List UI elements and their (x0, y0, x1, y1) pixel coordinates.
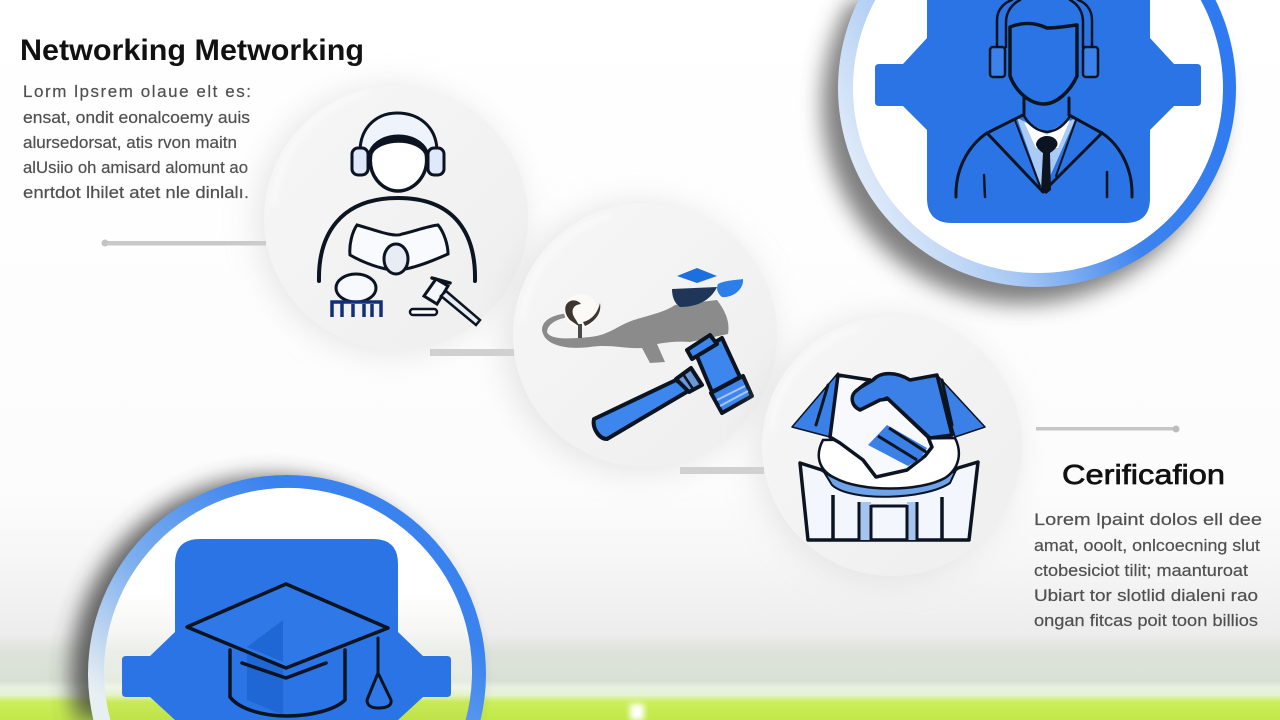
icon: man with headset and tie (956, 0, 1132, 197)
text block: left description: enrtdot lhilet atet nle dinlalı. (23, 183, 249, 202)
icon: person with headset, gavel and desk (319, 113, 480, 325)
panel: circle 1 with person and gavel icon (257, 86, 528, 353)
text block: left description: ensat, ondit eonalcoemy auis (23, 108, 250, 127)
icon: blue gavel (594, 335, 752, 439)
blue badge shape (122, 539, 451, 720)
icon: handshake over basket (792, 373, 985, 540)
text block: left description (23, 82, 251, 202)
connector line: third circle to right text (1036, 426, 1180, 432)
connector line: left text to first circle (102, 240, 266, 246)
text block: right description (1034, 510, 1262, 630)
heading: Certification: Cerificafion (1062, 459, 1225, 490)
panel: circle 3 with handshake icon (754, 316, 1022, 581)
text block: left description: alUsiio oh amisard alomunt ao (23, 158, 248, 177)
text block: right description: ongan fitcas poit toon billios (1034, 611, 1258, 630)
blue badge shape (875, 0, 1201, 223)
panel: large circle top right with person icon (822, 0, 1236, 304)
icon: shadow figure with graduation cap (542, 268, 743, 363)
text block: right description: amat, ooolt, onlcoecning slut (1034, 536, 1260, 555)
panel: circle 2 with gavel icon (504, 203, 777, 472)
icon: graduation cap (187, 584, 391, 716)
panel: large circle bottom left with graduation cap icon (71, 475, 486, 720)
text block: left description: alursedorsat, atis rvon maitn (23, 133, 237, 152)
text block: right description: ctobesiciot tilit; maanturoat (1034, 561, 1248, 580)
connector line: second to third circle (680, 467, 764, 474)
connector line: first to second circle (430, 349, 514, 356)
text block: right description: Ubiart tor slotlid dialeni rao (1034, 586, 1258, 605)
text block: left description: Lorm lpsrem olaue elt es: (23, 82, 251, 101)
text block: right description: Lorem lpaint dolos ell dee (1034, 510, 1262, 529)
heading: Networking Metworking: Networking Metworking (20, 34, 364, 67)
